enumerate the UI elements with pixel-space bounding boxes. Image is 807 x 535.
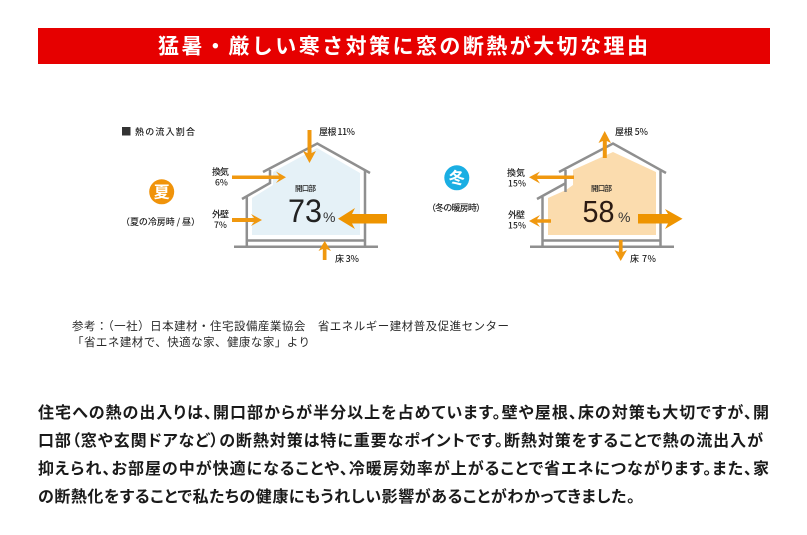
arrow: wall outflow [529, 215, 551, 227]
source note: 「省エネ建材で、快適な家、健康な家」より [72, 334, 310, 350]
arrow: roof inflow [303, 130, 316, 163]
body text: 抑えられ、お部屋の中が快適になることや、冷暖房効率が上がることで省エネにつながります。また、家 [38, 455, 769, 479]
house interior: summer [252, 148, 360, 235]
wall label: 外壁 [508, 208, 525, 221]
icon: winter badge [444, 164, 469, 190]
body text: 住宅への熱の出入りは、開口部からが半分以上を占めています。壁や屋根、床の対策も大切ですが、開 [38, 399, 769, 423]
icon: winter badge: 冬 [449, 164, 465, 188]
arrow: ventilation inflow [232, 172, 286, 183]
winter caption: （冬の暖房時） [427, 201, 485, 214]
arrow: opening inflow [338, 208, 387, 229]
arrow: roof outflow [598, 131, 611, 158]
opening label: 開口部 [591, 183, 612, 194]
wall label [212, 208, 229, 231]
wall label [508, 208, 526, 232]
panel: summer [121, 125, 387, 265]
opening label: 開口部 [295, 183, 316, 194]
arrow: opening outflow [638, 209, 682, 229]
panel: winter [427, 125, 682, 265]
ventilation label [507, 166, 526, 190]
source note: 参考：（一社）日本建材・住宅設備産業協会 省エネルギー建材普及促進センター [72, 318, 509, 334]
title banner [38, 28, 770, 64]
summer caption: （夏の冷房時 / 昼） [121, 215, 200, 228]
arrow: ventilation outflow [529, 172, 574, 184]
floor label: 床 3% [335, 252, 360, 265]
ventilation label [212, 165, 229, 188]
ventilation label: 換気 [507, 166, 525, 179]
ventilation label: 15% [508, 178, 526, 190]
value 73%: 73 [288, 193, 322, 229]
roof label: 屋根 5% [615, 125, 649, 138]
ventilation label: 換気 [212, 165, 229, 178]
wall label: 15% [508, 220, 526, 232]
wall label: 7% [214, 219, 227, 231]
body text: 口部（窓や玄関ドアなど）の断熱対策は特に重要なポイントです。断熱対策をすることで熱の流出入が [38, 427, 763, 451]
value 58%: % [618, 209, 630, 225]
house outline: summer [234, 144, 378, 247]
arrow: floor inflow [318, 241, 331, 260]
value 58%: 58 [582, 194, 614, 229]
body text [38, 399, 769, 507]
legend heading: heat inflow ratio: 熱の流入割合 [135, 125, 195, 138]
house interior: winter [548, 152, 656, 235]
icon: summer badge: 夏 [154, 178, 170, 202]
roof label: 屋根 11% [319, 125, 356, 138]
value 73%: % [323, 209, 335, 225]
arrow: wall inflow [232, 214, 262, 226]
source note [72, 318, 509, 350]
ventilation label: 6% [215, 176, 228, 188]
body text: の断熱化をすることで私たちの健康にもうれしい影響があることがわかってきました。 [38, 483, 635, 507]
title banner: 猛暑・厳しい寒さ対策に窓の断熱が大切な理由 [158, 30, 648, 60]
arrow: floor outflow [614, 240, 627, 261]
wall label: 外壁 [212, 208, 229, 220]
floor label: 床 7% [630, 252, 657, 265]
house outline: winter [530, 144, 674, 247]
icon: summer badge [149, 178, 174, 204]
